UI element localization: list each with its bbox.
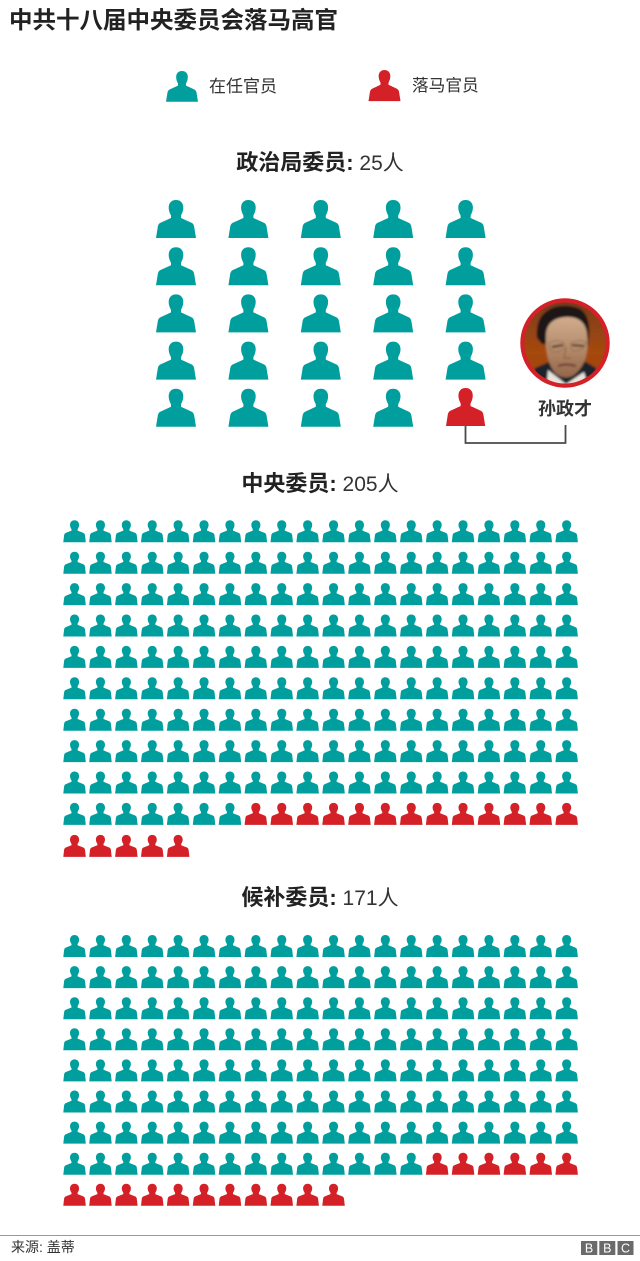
BBC logo: C (621, 1242, 630, 1256)
legend label: serving officials: 在任官员 (209, 77, 277, 96)
BBC logo (581, 1241, 634, 1256)
pictogram: politburo 25 members (156, 200, 486, 427)
heading: politburo: 政治局委员: 25人 (236, 150, 404, 174)
name label: Sun Zhengcai: 孙政才 (538, 399, 592, 419)
icon: fallen politburo member (446, 388, 485, 426)
legend label: fallen officials: 落马官员 (412, 76, 479, 95)
BBC logo: B (603, 1242, 611, 1256)
pictogram: alternate members 171 (63, 935, 578, 1206)
heading: alternate members: 候补委员: 171人 (241, 885, 399, 910)
legend icon: serving official (166, 71, 198, 102)
BBC logo: B (585, 1242, 593, 1256)
legend icon: fallen official (368, 70, 400, 101)
heading: central committee: 中央委员: 205人 (241, 470, 399, 496)
connector line (466, 425, 566, 443)
pictogram: central committee 205 members (63, 520, 578, 857)
source text: 来源: 盖蒂 (11, 1239, 75, 1255)
title: 中共十八届中央委员会落马高官 (9, 7, 338, 33)
portrait: Sun Zhengcai (520, 298, 610, 392)
